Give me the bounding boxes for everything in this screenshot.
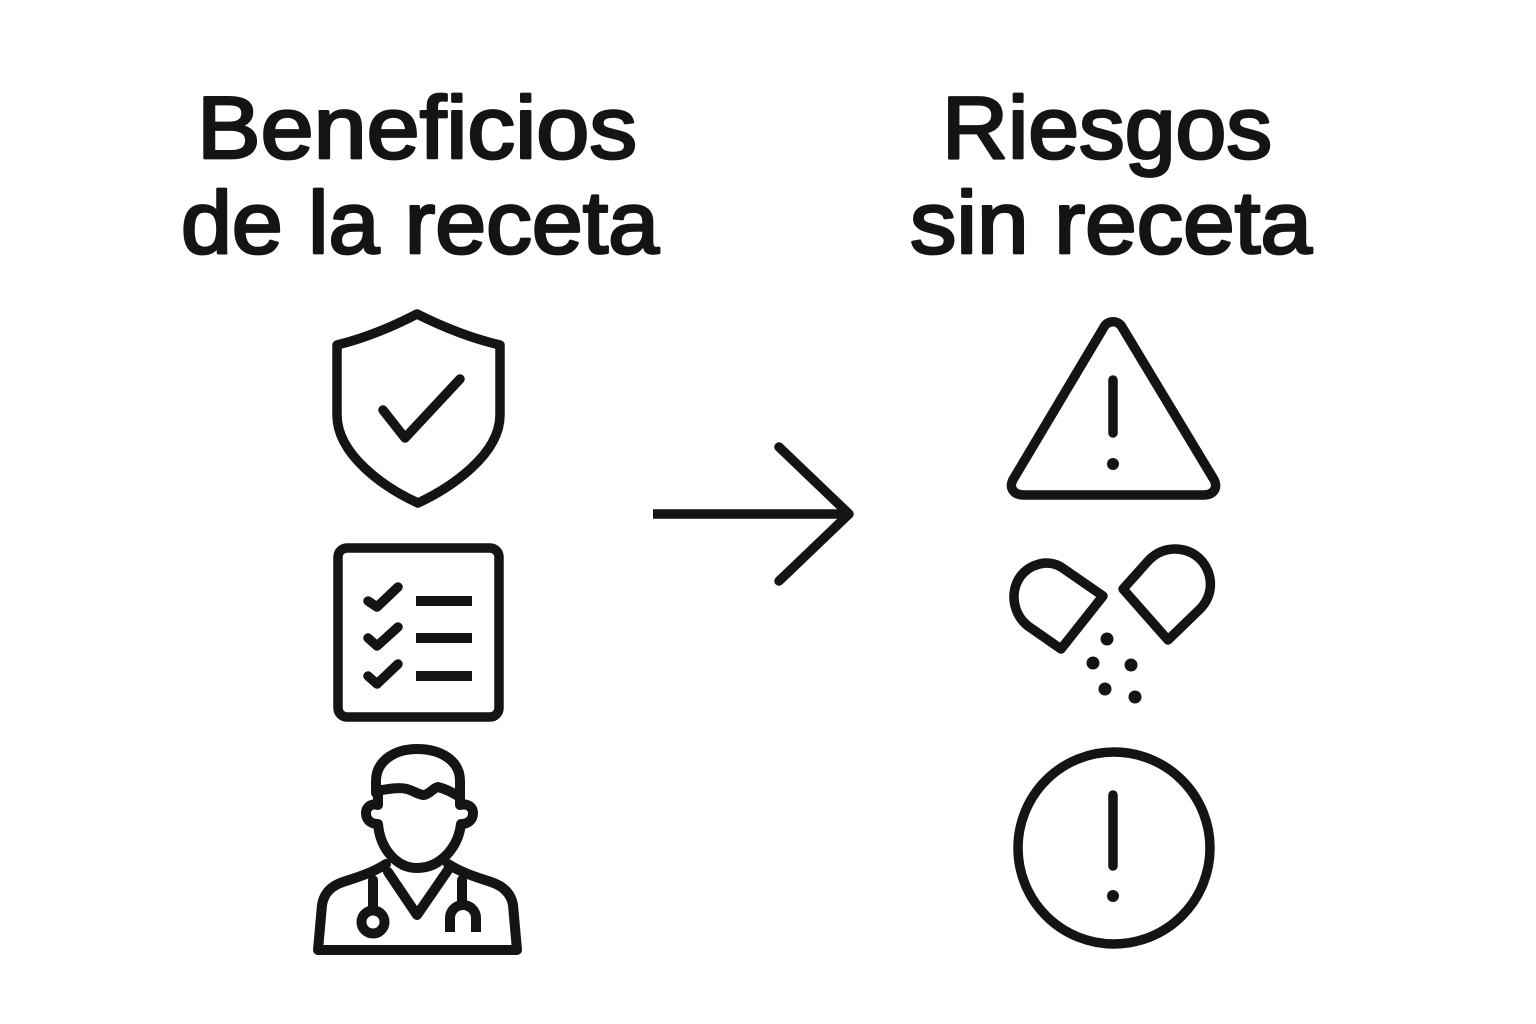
- heading: Beneficios de la receta: [181, 78, 659, 272]
- icon: broken capsule with powder: [1014, 549, 1210, 704]
- panel: beneficios: [181, 78, 659, 950]
- icon: doctor with stethoscope: [318, 749, 517, 950]
- heading: Beneficios de la receta: de la receta: [181, 173, 659, 272]
- icon: circle with exclamation mark: [1018, 752, 1210, 944]
- heading: Beneficios de la receta: Beneficios: [197, 78, 637, 177]
- heading: Riesgos sin receta: Riesgos: [942, 78, 1272, 177]
- arrow: [653, 447, 849, 581]
- panel: riesgos: [910, 78, 1312, 944]
- icon: shield with check: [337, 314, 500, 503]
- heading: Riesgos sin receta: sin receta: [910, 173, 1312, 272]
- icon: warning triangle: [1011, 322, 1216, 495]
- heading: Riesgos sin receta: [910, 78, 1312, 272]
- icon: checklist: [338, 548, 499, 717]
